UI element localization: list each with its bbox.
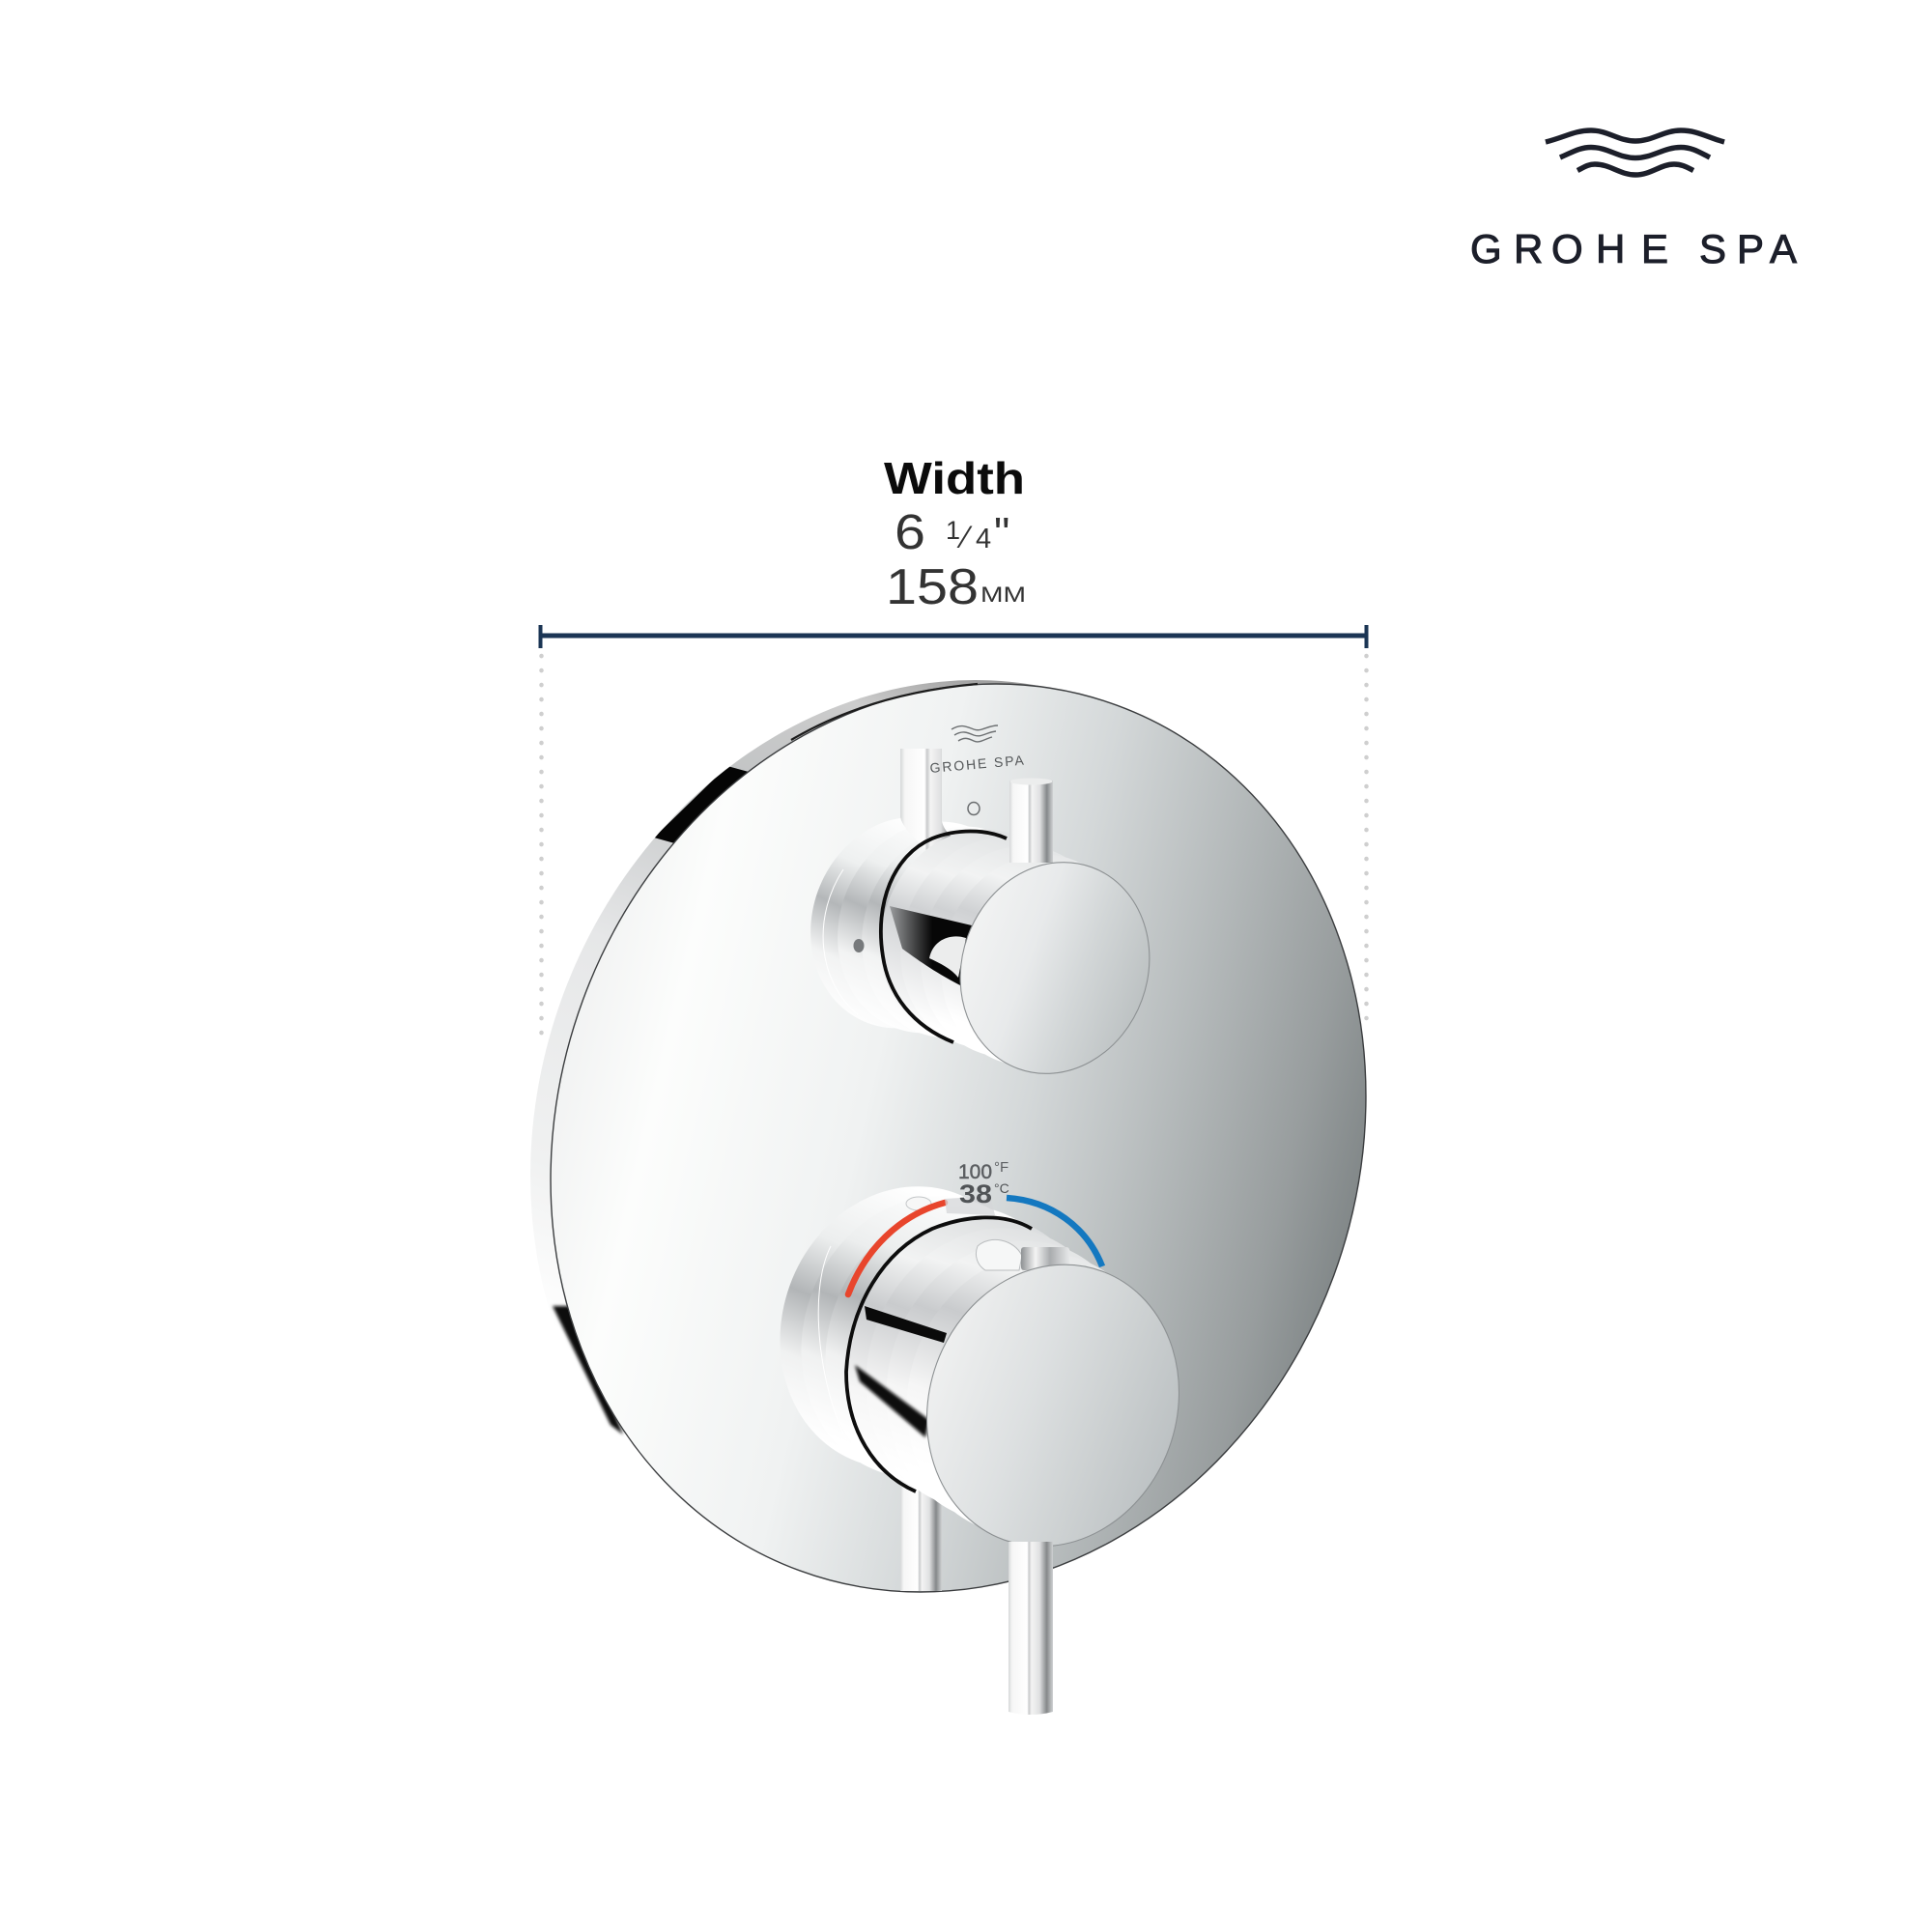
- upper knob disc: [931, 836, 1179, 1100]
- upper sleeve: [851, 803, 1159, 1093]
- temperature label 38°C: [959, 1179, 1009, 1208]
- gap ring: [846, 1217, 1032, 1492]
- upper knob body: [781, 790, 1080, 1065]
- temperature label 100°F: [958, 1159, 1009, 1183]
- small wordmark: GROHE SPA: [929, 752, 1026, 776]
- body button: [906, 1197, 931, 1210]
- scale bridge: [945, 1196, 995, 1215]
- gap ring: [881, 831, 1007, 1042]
- icon: logo waves: [1546, 130, 1724, 175]
- front lever upper: [1009, 781, 1053, 863]
- millimetres value: 158: [886, 559, 979, 615]
- dotted guide lines: [541, 656, 1366, 1036]
- plate face: [424, 568, 1492, 1708]
- sleeve reflection: [890, 906, 972, 985]
- inches value: [895, 504, 1009, 559]
- sleeve reflections: [855, 1306, 947, 1437]
- temperature label 38°C: 38: [959, 1179, 992, 1208]
- temperature label 38°C: °C: [994, 1180, 1009, 1196]
- plate top edge shadow: [791, 684, 978, 740]
- lower knob body: [741, 1151, 1117, 1523]
- dimension bar: [539, 625, 1368, 648]
- lower knob disc: [888, 1229, 1218, 1582]
- plate rim: [530, 680, 1039, 1435]
- indicator dot: [854, 939, 864, 952]
- label heading: Width: Width: [884, 453, 1025, 503]
- mode ring marker: [968, 802, 980, 815]
- temperature label 100°F: 100: [958, 1161, 992, 1183]
- small plate logo: [929, 725, 1026, 776]
- inches value: ": [994, 508, 1009, 558]
- lower knob: [741, 1151, 1218, 1582]
- logo: GROHE SPA: [1470, 130, 1797, 271]
- millimetres value: [886, 559, 1026, 615]
- cold arc: blue: [1007, 1198, 1102, 1266]
- lower knob stop: [976, 1239, 1069, 1270]
- logo wordmark: GROHE SPA: [1470, 226, 1797, 271]
- temperature scale: [848, 1159, 1102, 1294]
- icon: small waves: [952, 725, 998, 742]
- hot arc: red: [848, 1203, 945, 1294]
- upper knob: [781, 749, 1179, 1100]
- dimension label: width: [884, 453, 1026, 615]
- inches value: 4: [976, 524, 991, 554]
- lower front lever: [1009, 1542, 1053, 1715]
- inches value: ⁄: [956, 520, 973, 554]
- upper back lever: [900, 749, 958, 855]
- inches value: 6: [895, 504, 925, 559]
- inches value: 1: [946, 516, 960, 545]
- lower sleeve: [807, 1179, 1198, 1571]
- temperature label 100°F: °F: [994, 1159, 1009, 1176]
- lower back lever: [900, 1478, 942, 1591]
- millimetres value: MM: [980, 582, 1026, 607]
